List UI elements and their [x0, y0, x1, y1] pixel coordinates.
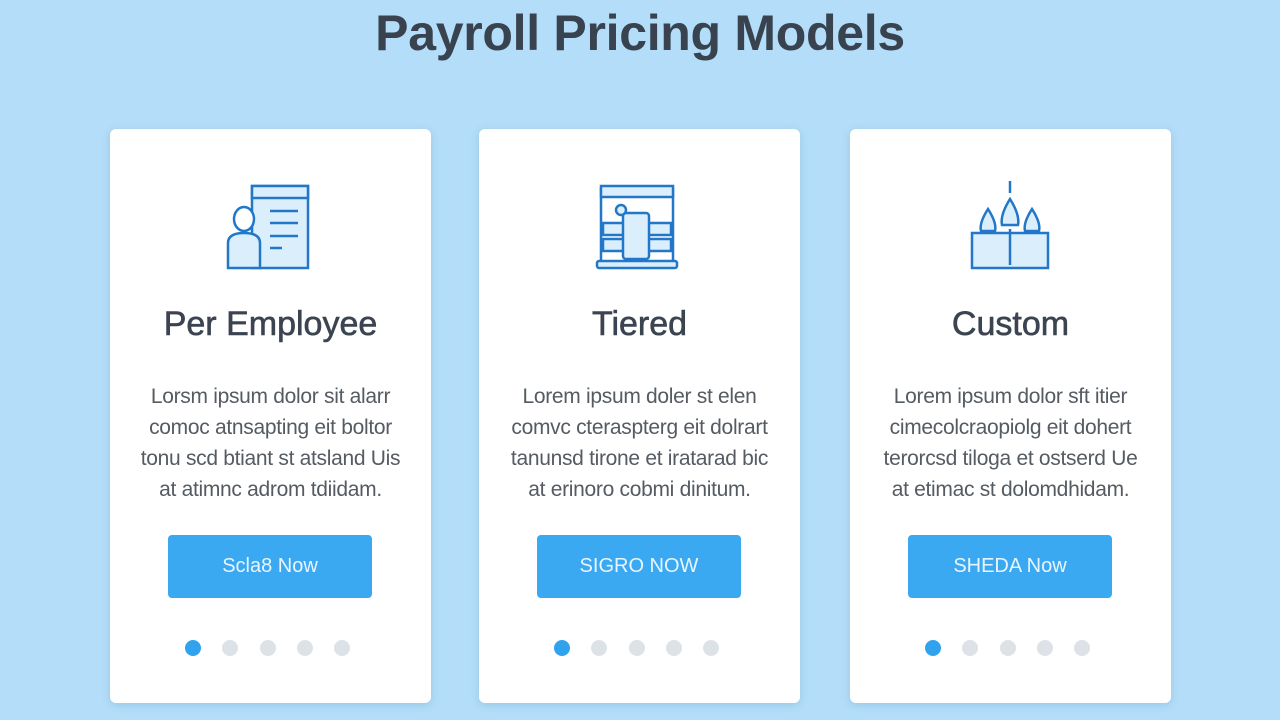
panel: custom	[850, 129, 1171, 703]
pagination dots	[925, 640, 1090, 656]
title: Payroll Pricing Models	[375, 5, 905, 61]
text: tanunsd tirone et iratarad bic	[511, 447, 768, 470]
text: cimecolcraopiolg eit dohert	[890, 416, 1131, 439]
text: comvc cteraspterg eit dolrart	[511, 416, 768, 439]
panel: tiered	[479, 129, 800, 703]
text: terorcsd tiloga et ostserd Ue	[884, 447, 1137, 470]
pagination dots	[554, 640, 719, 656]
text: tonu scd btiant st atsland Uis	[141, 447, 400, 470]
text: Lorem ipsum doler st elen	[522, 385, 757, 408]
button	[908, 535, 1112, 598]
panel: per employee	[110, 129, 431, 703]
button: SHEDA Now	[953, 555, 1067, 577]
text: at erinoro cobmi dinitum.	[528, 478, 751, 501]
button: SIGRO NOW	[580, 555, 698, 577]
text: comoc atnsapting eit boltor	[149, 416, 392, 439]
button	[168, 535, 372, 598]
text: Lorem ipsum dolor sft itier	[894, 385, 1127, 408]
text	[141, 385, 400, 501]
icon: employee sheet	[226, 184, 310, 270]
text: at atimnc adrom tdiidam.	[159, 478, 382, 501]
heading: Per Employee	[164, 305, 377, 343]
icon: domes	[970, 181, 1050, 270]
icon: tiered booth	[596, 184, 678, 270]
text	[511, 385, 768, 501]
button: Scla8 Now	[222, 555, 318, 577]
text: Lorsm ipsum dolor sit alarr	[151, 385, 390, 408]
pagination dots	[185, 640, 350, 656]
button	[537, 535, 741, 598]
heading: Custom	[952, 305, 1069, 343]
text	[884, 385, 1137, 501]
text: at etimac st dolomdhidam.	[892, 478, 1129, 501]
heading: Tiered	[592, 305, 687, 343]
